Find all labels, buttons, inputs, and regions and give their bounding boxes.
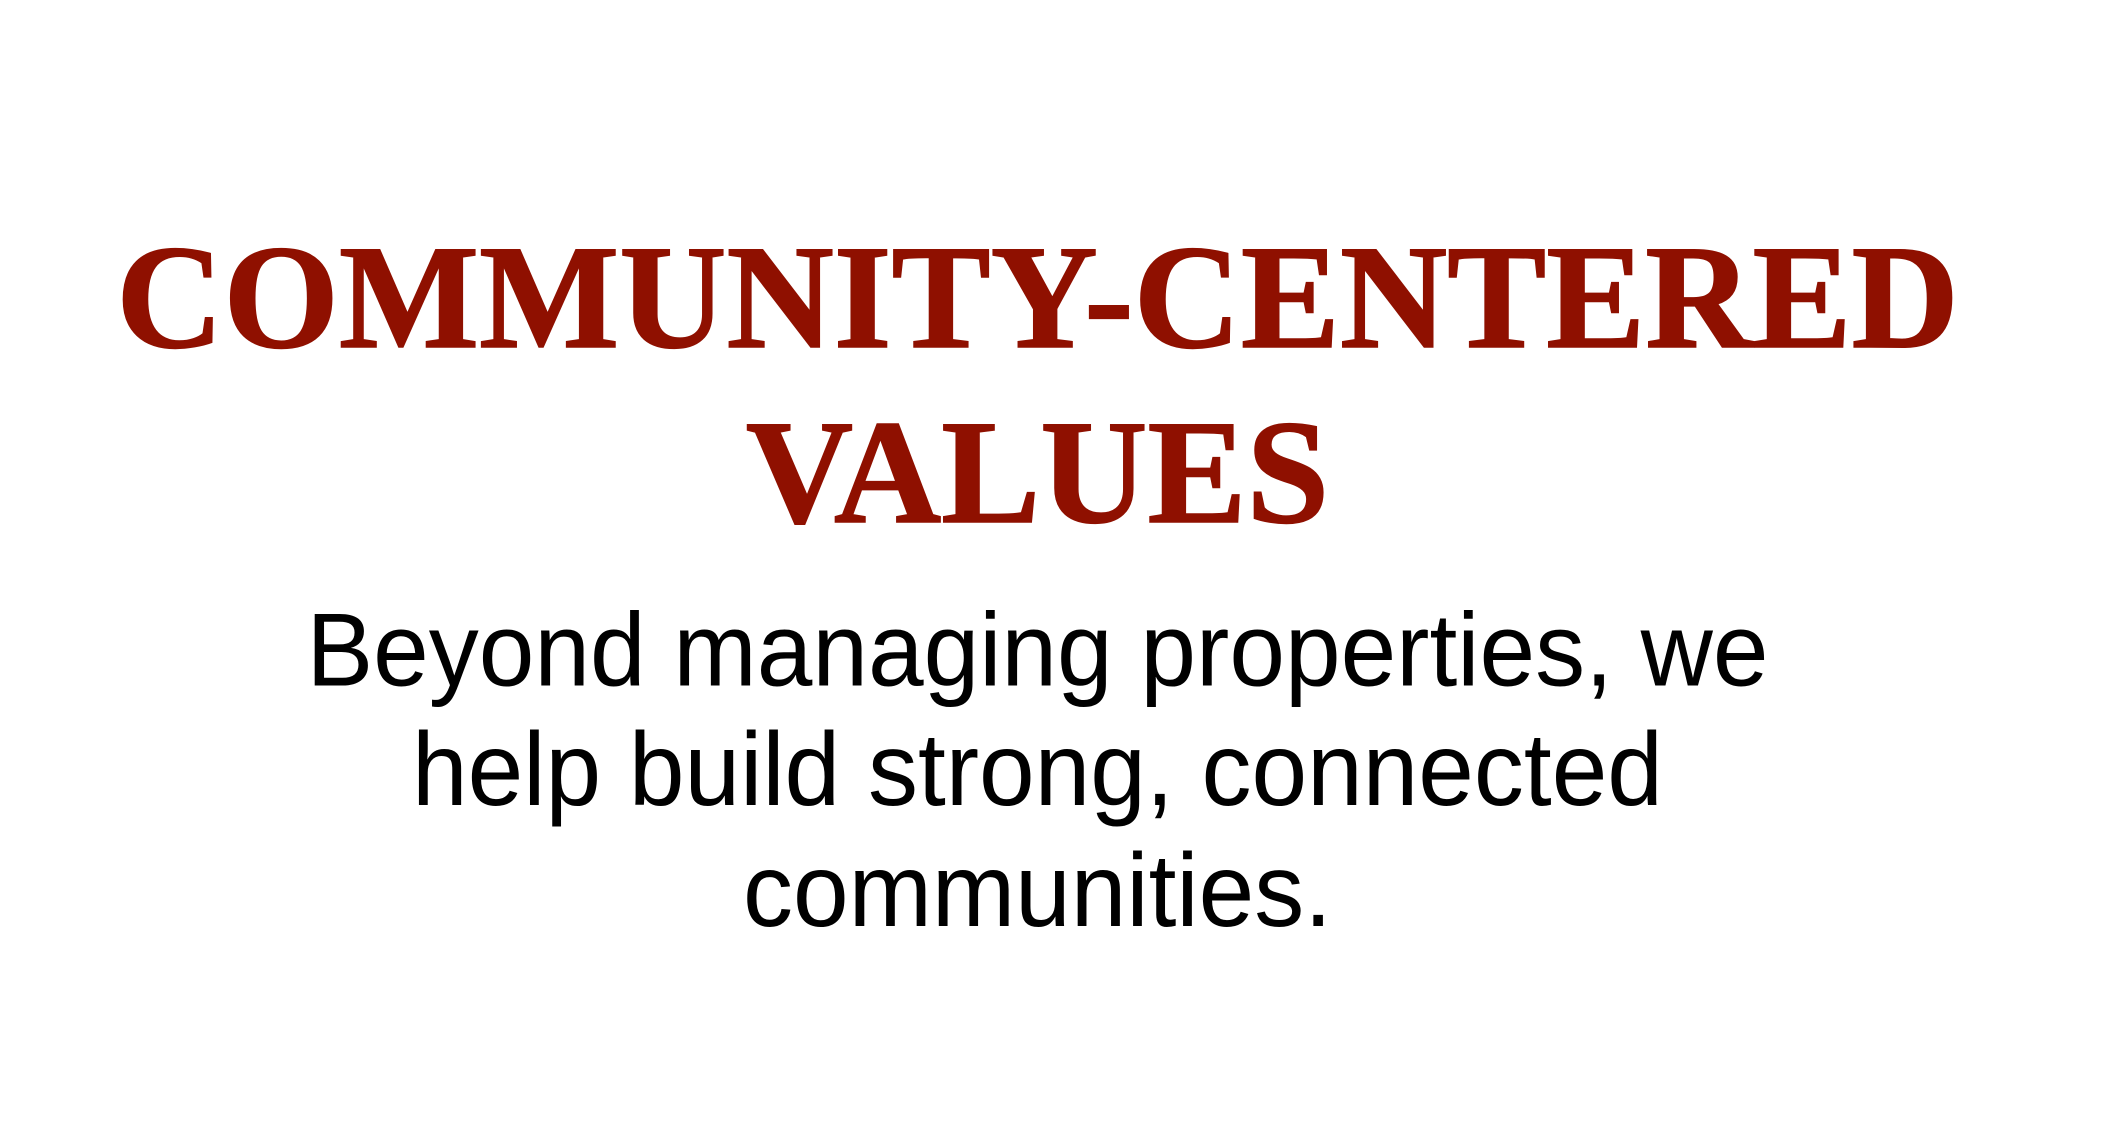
text block: description: communities. — [743, 832, 1332, 949]
text block: description — [306, 592, 1768, 949]
title: VALUES — [746, 391, 1329, 555]
text block: description: help build strong, connected — [412, 712, 1663, 829]
title: COMMUNITY-CENTERED — [116, 216, 1959, 380]
text block: description: Beyond managing properties, we — [306, 592, 1768, 709]
title — [116, 216, 1959, 555]
